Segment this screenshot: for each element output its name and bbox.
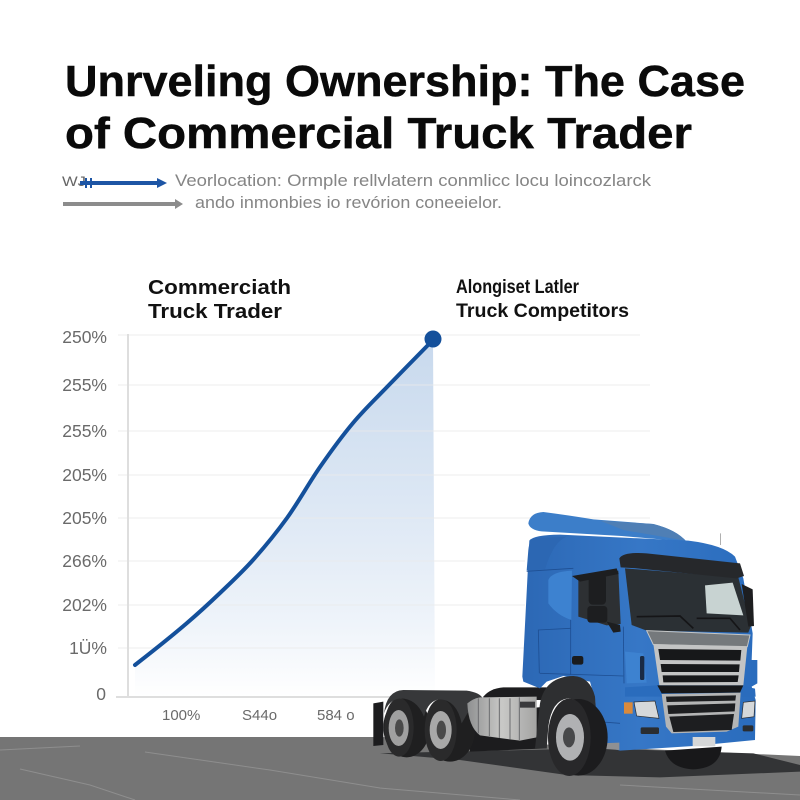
x axis labels: S44o (242, 707, 277, 724)
cab side panel lines (527, 568, 624, 723)
data line (135, 340, 433, 665)
chart heading: competitors: Alongiset Latler (456, 277, 580, 298)
chassis top (483, 687, 547, 700)
fog lights (641, 725, 753, 734)
roof fairing grey top (600, 521, 685, 541)
fuel tank (467, 697, 537, 741)
cab body (522, 535, 757, 751)
door handle (572, 656, 583, 665)
upper grille (653, 644, 747, 685)
chart heading: Commercial Truck Trader: Truck Trader (148, 300, 282, 323)
gridlines (118, 335, 650, 648)
axes (116, 334, 400, 697)
windshield reflection (705, 583, 743, 615)
chart heading: competitors (456, 277, 629, 322)
area under curve (135, 340, 435, 697)
chart heading: competitors: Truck Competitors (456, 301, 629, 322)
x axis labels: 584 o (317, 707, 355, 724)
line chart (62, 327, 650, 724)
sun visor (619, 553, 744, 578)
side window (578, 571, 621, 625)
y axis labels: 205% (62, 465, 107, 485)
icon: blue legend arrow (80, 178, 167, 188)
end marker (424, 330, 442, 348)
y axis labels (62, 327, 107, 704)
legend label: WJ (62, 173, 86, 189)
chart heading: Commercial Truck Trader (148, 276, 291, 323)
truck shadow (380, 748, 800, 777)
antenna (720, 533, 722, 545)
wheel arch (535, 676, 598, 748)
dark grille gap (657, 685, 743, 693)
rear mudguards (384, 690, 483, 723)
y axis labels: 202% (62, 595, 107, 615)
lower grille (662, 693, 741, 733)
right front wheel (665, 747, 722, 769)
left headlight (624, 701, 659, 718)
title: Unrveling Ownership: The Case (65, 57, 745, 106)
rear wheel 2 (425, 698, 475, 762)
x axis labels: 100% (162, 707, 200, 724)
front wheel (548, 699, 608, 776)
chart heading: Commercial Truck Trader: Commerciath (148, 276, 291, 299)
road (0, 737, 800, 800)
right mirror (742, 584, 754, 627)
rear cab window highlight (548, 571, 572, 620)
legend description: ando inmonbies io revórion coneeielor. (195, 194, 502, 212)
wing mirror (572, 568, 621, 633)
y axis labels: 255% (62, 375, 107, 395)
bumper trim (625, 685, 756, 697)
y axis labels: 0 (96, 684, 106, 704)
rear wheel 1 (383, 697, 430, 757)
step (598, 743, 619, 750)
y axis labels: 205% (62, 508, 107, 528)
licence plate (693, 737, 715, 746)
road markings (0, 746, 800, 800)
y axis labels: 266% (62, 551, 107, 571)
legend (62, 172, 652, 212)
rear chassis (373, 702, 547, 752)
legend description (175, 172, 652, 212)
cheek highlight and slit (625, 652, 647, 683)
y axis labels: 1Ü% (69, 638, 107, 658)
cab roof shading (527, 537, 567, 571)
title: of Commercial Truck Trader (65, 109, 692, 158)
right headlight (742, 701, 755, 718)
windshield (625, 568, 751, 633)
y axis labels: 255% (62, 421, 107, 441)
title (65, 57, 745, 158)
legend description: Veorlocation: Ormple rellvlatern conmlicc locu loincozlarck (175, 172, 652, 190)
grille badge plate (647, 631, 750, 647)
roof fairing (528, 512, 687, 542)
icon: grey legend arrow (63, 199, 183, 209)
y axis labels: 250% (62, 327, 107, 347)
truck illustration (373, 512, 800, 777)
wipers (637, 616, 740, 630)
x axis labels (162, 707, 355, 724)
